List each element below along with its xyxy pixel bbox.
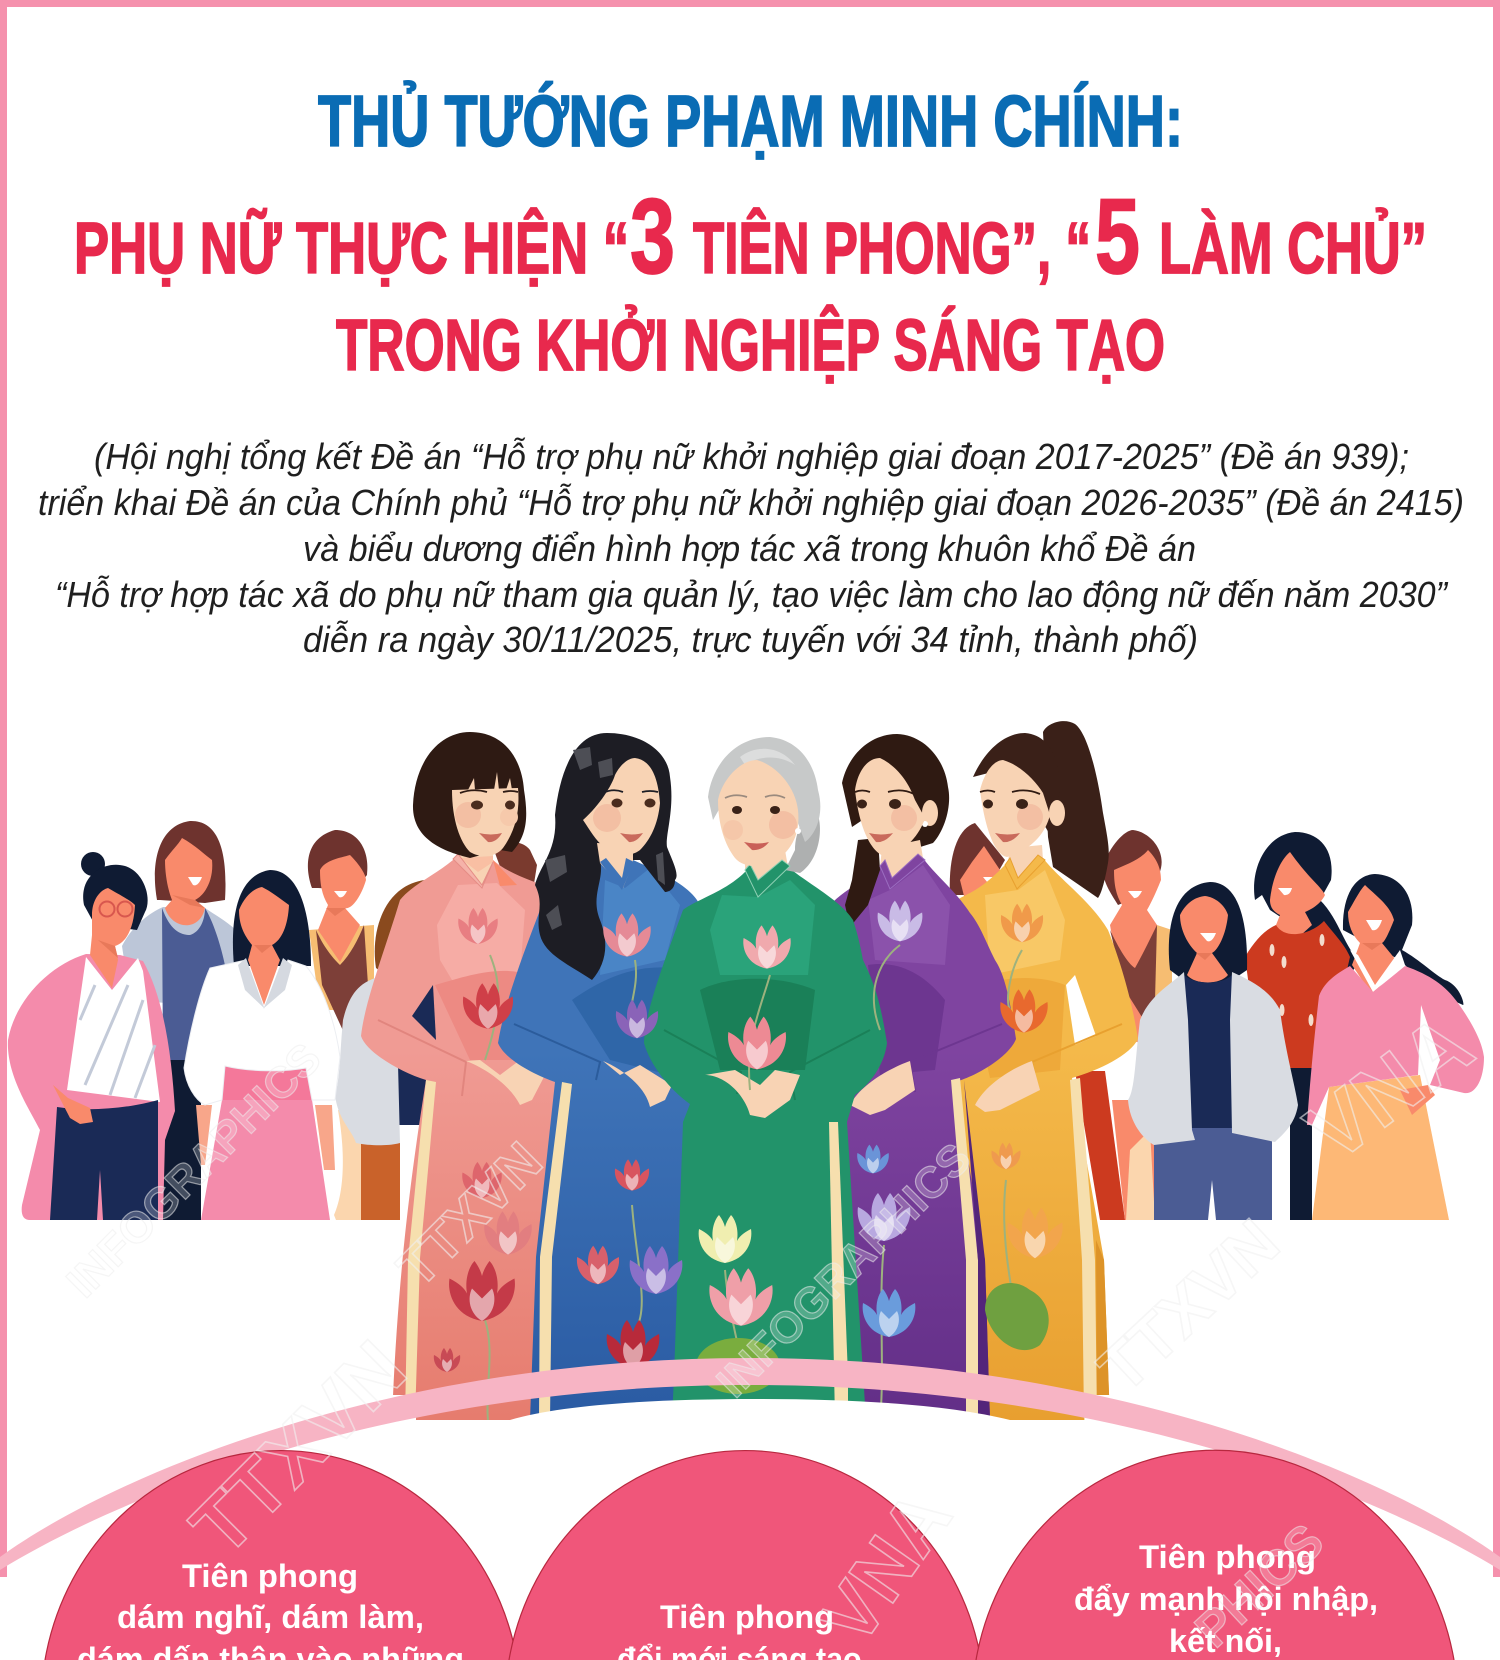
woman in grey cardigan behind <box>334 880 435 1220</box>
woman in grey cardigan and navy tee <box>1128 882 1298 1220</box>
pink dress flowers <box>434 908 532 1372</box>
woman in brown V-neck <box>308 830 374 1035</box>
title: blue headline: THỦ TƯỚNG PHẠM MINH CHÍNH: <box>318 81 1183 162</box>
woman in white blouse and pink skirt <box>184 870 340 1220</box>
watermarks: INFOGRAPHICS <box>707 1134 981 1407</box>
illustration: group of women <box>8 721 1484 1420</box>
subtitle text block: (Hội nghị tổng kết Đề án “Hỗ trợ phụ nữ khởi nghiệp giai đoạn 2017-2025” (Đề án 939); <box>94 436 1409 477</box>
lotus flowers on the dresses <box>434 901 1063 1420</box>
woman in pink sweater and orange skirt <box>1307 874 1484 1220</box>
watermarks: PHICS <box>1184 1513 1334 1658</box>
yellow dress flowers <box>985 904 1063 1350</box>
panel: Tiên phong đẩy mạnh hội nhập <box>976 1450 1454 1660</box>
purple dress flowers <box>857 901 922 1337</box>
panel: Tiên phong đổi mới sáng tạo <box>509 1451 981 1660</box>
panel: Tiên phong dám nghĩ <box>45 1451 517 1660</box>
woman in brown V-neck right <box>1102 830 1172 1050</box>
woman in purple ao dai <box>820 734 1016 1420</box>
subtitle text block <box>38 436 1464 660</box>
stems <box>485 945 1022 1420</box>
subtitle text block: “Hỗ trợ hợp tác xã do phụ nữ tham gia quản lý, tạo việc làm cho lao động nữ đến năm 2030” <box>55 574 1449 615</box>
panel: Tiên phong đẩy mạnh hội nhập: đẩy mạnh hội nhập, <box>1074 1581 1378 1617</box>
watermarks: TTXVN <box>174 1324 422 1572</box>
panel: Tiên phong đẩy mạnh hội nhập: Tiên phong <box>1139 1539 1316 1575</box>
watermarks: VNA <box>802 1474 968 1660</box>
panel: Tiên phong dám nghĩ: Tiên phong <box>182 1558 358 1594</box>
title: red headline: TRONG KHỞI NGHIỆP SÁNG TẠO <box>336 305 1165 386</box>
watermarks <box>57 996 1490 1660</box>
subtitle text block: diễn ra ngày 30/11/2025, trực tuyến với 34 tỉnh, thành phố) <box>303 619 1198 660</box>
woman in red top <box>1245 832 1360 1220</box>
woman in pink cardigan with glasses <box>8 852 175 1220</box>
panel: Tiên phong đổi mới sáng tạo: Tiên phong <box>660 1599 834 1635</box>
subtitle text block: và biểu dương điển hình hợp tác xã trong khuôn khổ Đề án <box>303 528 1196 569</box>
decorative pink arc band <box>0 1358 1500 1570</box>
panel: Tiên phong dám nghĩ: dám nghĩ, dám làm, <box>117 1599 424 1635</box>
panel: Tiên phong đẩy mạnh hội nhập: kết nối, <box>1169 1623 1282 1659</box>
blue dress flowers <box>577 913 682 1368</box>
title: red headline <box>74 176 1427 386</box>
title: red headline: PHỤ NỮ THỰC HIỆN “ <box>74 208 629 289</box>
red skirt woman behind yellow dress <box>1075 1071 1160 1220</box>
watermarks: TTXVN <box>386 1131 554 1298</box>
title: red headline: 3 <box>630 176 675 296</box>
woman in blue tee <box>122 821 250 1220</box>
woman in green ao dai <box>644 737 887 1420</box>
woman in yellow ao dai <box>945 721 1138 1420</box>
background women left <box>8 821 435 1220</box>
title: red headline: 5 <box>1095 176 1140 296</box>
woman in blue ao dai <box>498 733 700 1420</box>
woman in pink ao dai <box>361 732 575 1420</box>
watermarks: TTXVN <box>1084 1205 1293 1406</box>
title: red headline: TIÊN PHONG”, “ <box>693 208 1091 289</box>
white curve cutting the dresses <box>380 1395 1125 1450</box>
background women right <box>950 823 1484 1220</box>
green dress flowers <box>696 925 791 1394</box>
woman behind yellow dress <box>950 823 1010 900</box>
watermarks: INFOGRAPHICS <box>57 1034 331 1307</box>
watermarks: VNA <box>1289 996 1490 1180</box>
